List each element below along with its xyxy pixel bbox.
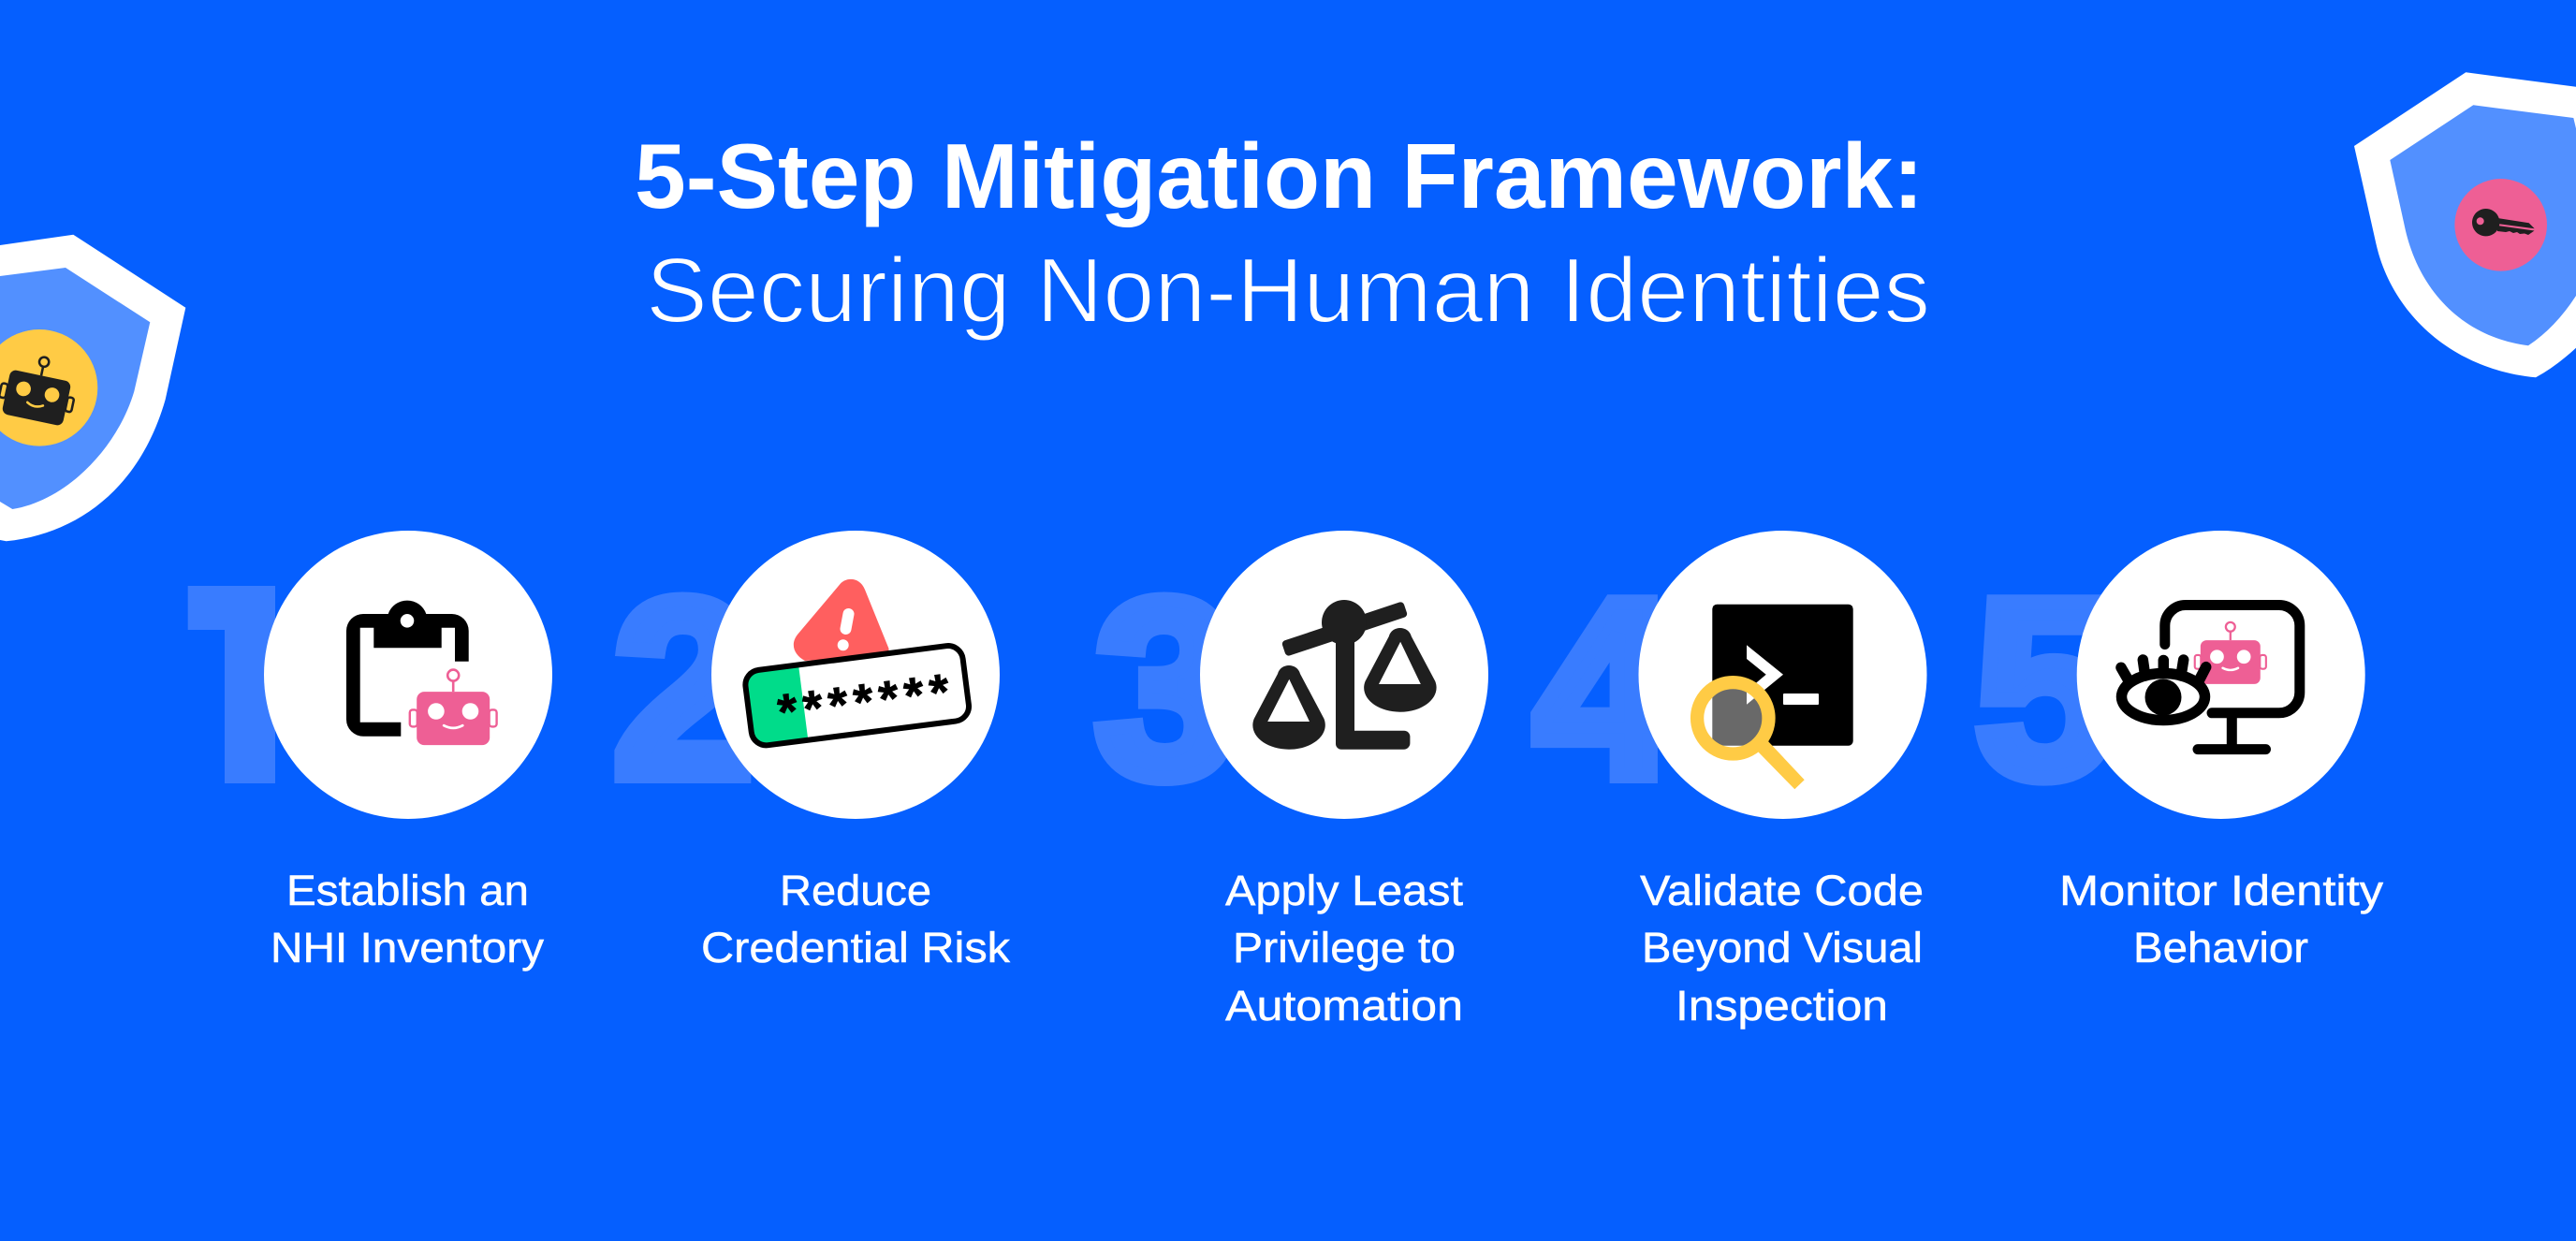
panel: step 3 bbox=[1095, 531, 1488, 1029]
caption bbox=[2059, 867, 2384, 971]
caption: Automation bbox=[1225, 982, 1463, 1029]
step number 3: 3 bbox=[1095, 548, 1236, 830]
caption: Monitor Identity bbox=[2059, 867, 2384, 914]
caption bbox=[271, 867, 545, 971]
icon: warning and password field bbox=[744, 579, 971, 747]
caption: Validate Code bbox=[1640, 867, 1924, 914]
caption bbox=[701, 867, 1011, 971]
circle bbox=[711, 531, 1000, 819]
step number 2: 2 bbox=[613, 548, 754, 830]
caption: NHI Inventory bbox=[271, 924, 545, 971]
panel: step 2 bbox=[613, 531, 1011, 971]
caption: Apply Least bbox=[1225, 867, 1464, 914]
circle bbox=[1200, 531, 1488, 819]
icon: scales bbox=[1252, 600, 1437, 750]
icon: pink robot bbox=[410, 670, 497, 745]
title line 1: 5-Step Mitigation Framework: bbox=[635, 124, 1924, 227]
icon: dark robot bbox=[0, 350, 81, 428]
icon: clipboard with robot bbox=[346, 601, 497, 745]
caption: Credential Risk bbox=[701, 924, 1011, 971]
panel: step 5 bbox=[1975, 531, 2384, 971]
icon: key bbox=[2472, 209, 2535, 236]
title bbox=[635, 124, 1930, 342]
caption: Inspection bbox=[1676, 982, 1888, 1029]
caption: Establish an bbox=[286, 867, 529, 914]
step number 5: 5 bbox=[1975, 548, 2115, 830]
step number 1: 1 bbox=[171, 548, 312, 830]
caption: Reduce bbox=[780, 867, 931, 914]
caption: Beyond Visual bbox=[1642, 924, 1923, 971]
circle bbox=[2077, 531, 2365, 819]
panel: step 4 bbox=[1534, 531, 1926, 1029]
circle bbox=[1638, 531, 1926, 819]
caption: Behavior bbox=[2133, 924, 2308, 971]
right shield with key badge bbox=[2354, 72, 2576, 377]
panel: step 1 bbox=[171, 531, 552, 971]
icon: eye watching robot on monitor bbox=[2121, 605, 2300, 750]
infographic canvas bbox=[0, 72, 2576, 1029]
icon: terminal with magnifier bbox=[1697, 605, 1853, 789]
step number 4: 4 bbox=[1534, 548, 1676, 830]
left shield with robot badge bbox=[0, 235, 185, 541]
caption bbox=[1640, 867, 1924, 1029]
caption bbox=[1225, 867, 1464, 1029]
circle bbox=[264, 531, 552, 819]
caption: Privilege to bbox=[1233, 924, 1456, 971]
masked password: ******* bbox=[774, 664, 953, 741]
title line 2: Securing Non-Human Identities bbox=[646, 239, 1930, 342]
